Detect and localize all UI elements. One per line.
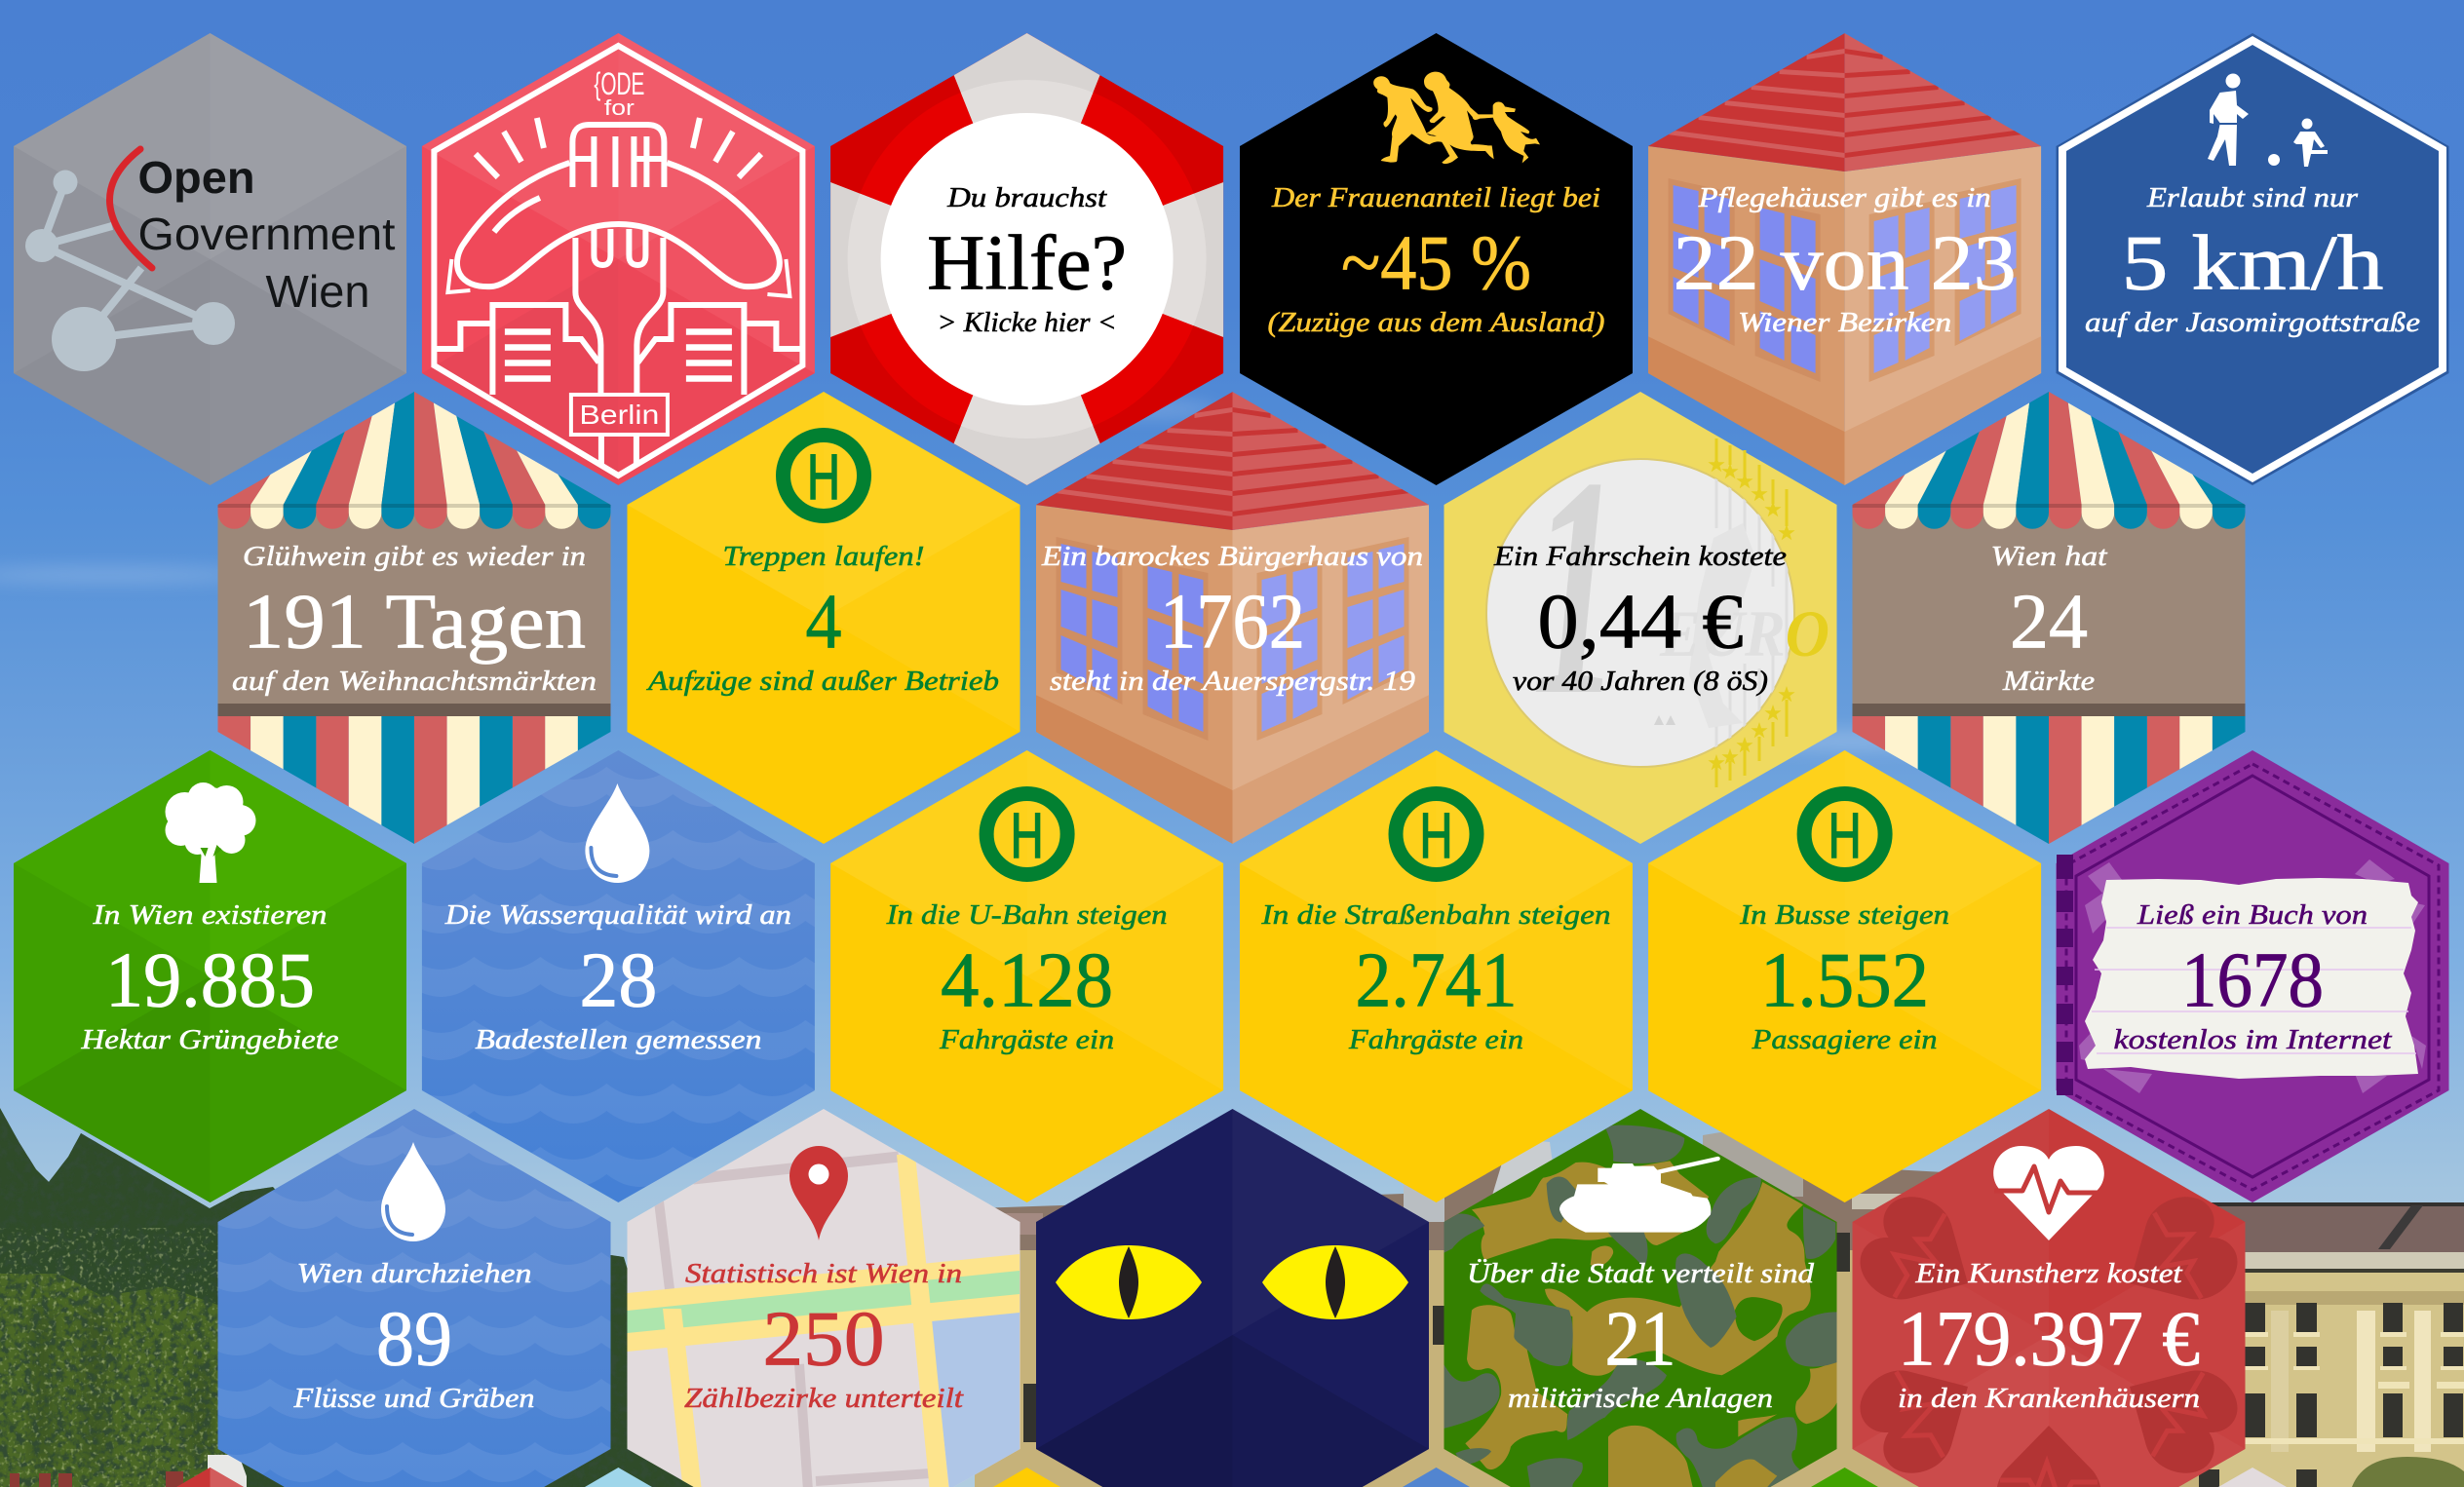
text: Flüsse: 89	[376, 1296, 452, 1382]
text: Zählbezirke: Statistisch ist Wien in	[685, 1258, 962, 1289]
icon: running family	[1373, 72, 1540, 164]
text: Frauenanteil: (Zuzüge aus dem Ausland)	[1267, 307, 1604, 338]
logo text	[579, 66, 659, 430]
text: Schrittgeschwindigkeit: 5 km/h	[2121, 220, 2384, 306]
panel: Glühwein	[217, 255, 611, 848]
text: Fahrschein: 0,44 €	[1538, 579, 1743, 665]
text: Märkte: 24	[2010, 579, 2088, 665]
text: Grüngebiete: 19.885	[105, 937, 315, 1023]
text: Bürgerhaus: steht in der Auerspergstr. 19	[1050, 666, 1416, 697]
text: Glühwein: auf den Weihnachtsmärkten	[232, 666, 597, 697]
logo wordmark: Open	[138, 152, 254, 203]
icon: house	[1035, 392, 1429, 844]
icon: house	[1648, 33, 2042, 485]
text: Märkte: Märkte	[2002, 666, 2095, 697]
panel: Fahrschein coin	[1444, 392, 1836, 844]
text: Schrittgeschwindigkeit	[2085, 182, 2420, 338]
logo text: {ODE	[594, 66, 644, 101]
panel: Buch	[2057, 750, 2448, 1202]
text: Grüngebiete	[80, 899, 339, 1055]
text: Fahrschein: Ein Fahrschein kostete	[1493, 541, 1787, 572]
text: U-Bahn	[885, 899, 1168, 1055]
logo wordmark: Government	[138, 209, 396, 259]
icon: lifebuoy ring	[830, 33, 1224, 485]
text: Pflegehäuser: Wiener Bezirken	[1738, 307, 1951, 338]
text: Zählbezirke	[684, 1258, 964, 1414]
panel: Jasomirgottstraße	[2057, 33, 2448, 485]
icon: network nodes	[25, 170, 235, 371]
text: Busse: In Busse steigen	[1739, 899, 1949, 931]
text: Märkte: Wien hat	[1991, 541, 2108, 572]
icon: cat eyes	[1056, 1245, 1408, 1319]
text: Hilfe: Du brauchst	[946, 182, 1107, 213]
text: Anlagen	[1467, 1258, 1815, 1414]
text: Kunstherz	[1898, 1258, 2200, 1414]
text: Frauenanteil	[1267, 182, 1604, 338]
text: Wasserqualität: Badestellen gemessen	[475, 1024, 761, 1055]
icon: euro coin: EURO	[1659, 596, 1829, 670]
text: Straßenbahn: Fahrgäste ein	[1348, 1024, 1523, 1055]
icon: bus stop sign	[1804, 793, 1885, 875]
icon: bus stop sign	[986, 793, 1067, 875]
background: palace	[975, 1128, 2464, 1487]
text: Kunstherz: Ein Kunstherz kostet	[1914, 1258, 2183, 1289]
text: Buch	[2113, 899, 2393, 1055]
panel: militärische Anlagen	[1443, 1109, 1837, 1487]
text: Märkte	[1990, 541, 2108, 697]
text: Aufzüge: 4	[805, 579, 842, 665]
text: Bürgerhaus: 1762	[1160, 579, 1305, 665]
text: Aufzüge: Aufzüge sind außer Betrieb	[646, 666, 999, 697]
panel: Busse	[1648, 750, 2041, 1202]
text: Glühwein: Glühwein gibt es wieder in	[243, 541, 586, 572]
text: U-Bahn: 4.128	[941, 937, 1113, 1023]
text: Frauenanteil: Der Frauenanteil liegt bei	[1271, 182, 1600, 213]
panel: Kunstherz	[1849, 1109, 2249, 1487]
text: Anlagen: militärische Anlagen	[1508, 1383, 1773, 1414]
text: Busse: Passagiere ein	[1751, 1024, 1938, 1055]
panel: Pflegehäuser	[1648, 33, 2042, 485]
icon: water drop	[381, 1142, 445, 1241]
panel: U-Bahn	[830, 750, 1223, 1202]
text: Fahrschein	[1493, 541, 1787, 697]
logo text: Berlin	[579, 400, 659, 430]
text: U-Bahn: In die U-Bahn steigen	[885, 899, 1168, 931]
panel: Code for Berlin	[422, 33, 815, 485]
text: Buch: Ließ ein Buch von	[2137, 899, 2368, 931]
icon: map pin	[789, 1146, 848, 1240]
text: Straßenbahn	[1260, 899, 1610, 1055]
text: Pflegehäuser: 22 von 23	[1674, 220, 2017, 306]
icon: sausage, fork and city line art	[434, 46, 802, 476]
logo wordmark: Wien	[265, 266, 370, 317]
icon: market stall	[1852, 255, 2246, 848]
text: Zählbezirke: Zählbezirke unterteilt	[684, 1383, 964, 1414]
text: Buch: kostenlos im Internet	[2113, 1024, 2393, 1055]
text: Zählbezirke: 250	[763, 1296, 884, 1382]
logo wordmark	[138, 152, 396, 317]
text: Busse: 1.552	[1760, 937, 1929, 1023]
text: Buch: 1678	[2181, 937, 2324, 1023]
icon: bus stop sign	[1396, 793, 1477, 875]
text: Flüsse: Flüsse und Gräben	[292, 1383, 534, 1414]
cropped next row of hexagons	[176, 1468, 2287, 1487]
text: Busse	[1739, 899, 1949, 1055]
text: Pflegehäuser: Pflegehäuser gibt es in	[1697, 182, 1991, 213]
background: clouds	[0, 402, 2349, 1074]
icon: red arc	[110, 149, 152, 268]
icon: bus stop sign: H	[807, 440, 840, 513]
icon: bus stop sign	[784, 435, 864, 516]
panel: Bürgerhaus	[1035, 392, 1429, 844]
panel: cat eyes	[1036, 1109, 1429, 1487]
icon: heart with pulse	[1993, 1146, 2104, 1240]
text: Fahrschein: vor 40 Jahren (8 öS)	[1513, 666, 1768, 697]
text: Hilfe	[927, 182, 1127, 338]
panel: Open Government Wien	[14, 33, 406, 485]
text: Frauenanteil: ~45 %	[1341, 220, 1531, 306]
text: Glühwein	[232, 541, 597, 697]
text: Aufzüge: Treppen laufen!	[723, 541, 924, 572]
note paper with tape	[2079, 859, 2426, 1093]
icon: pedestrian and child	[2208, 74, 2328, 167]
panel: Aufzüge	[628, 392, 1020, 844]
faint heart pattern	[1849, 1184, 2249, 1487]
panel: Flüsse	[218, 1109, 610, 1487]
icon: bus stop sign: H	[1829, 799, 1862, 871]
text: U-Bahn: Fahrgäste ein	[939, 1024, 1114, 1055]
text: Schrittgeschwindigkeit: auf der Jasomirgottstraße	[2085, 307, 2420, 338]
text: Kunstherz: in den Krankenhäusern	[1898, 1383, 2200, 1414]
background: trees	[0, 1108, 694, 1487]
text: Schrittgeschwindigkeit: Erlaubt sind nur	[2146, 182, 2359, 213]
panel: Märkte	[1852, 255, 2246, 848]
text: Bürgerhaus: Ein barockes Bürgerhaus von	[1041, 541, 1423, 572]
text: Kunstherz: 179.397 €	[1898, 1296, 2200, 1382]
icon: bus stop sign: H	[1419, 799, 1452, 871]
panel: Hilfe lifebuoy	[830, 33, 1224, 485]
text: Straßenbahn: 2.741	[1355, 937, 1517, 1023]
text: Wasserqualität: 28	[579, 937, 657, 1023]
text: Flüsse	[292, 1258, 534, 1414]
text: Aufzüge	[646, 541, 999, 697]
text: Glühwein: 191 Tagen	[243, 579, 586, 665]
text: Pflegehäuser	[1674, 182, 2017, 338]
text: Hilfe: > Klicke hier <	[938, 307, 1117, 338]
icon: tree	[166, 782, 255, 883]
camouflage pattern	[1443, 1125, 1837, 1487]
map streets	[627, 1155, 1020, 1487]
text: Grüngebiete: In Wien existieren	[92, 899, 327, 931]
icon: euro coin: 1	[1532, 412, 1620, 760]
book stitching and spine	[2057, 764, 2439, 1190]
icon: euro coin	[1486, 412, 1829, 787]
panel: Straßenbahn	[1240, 750, 1633, 1202]
text: Grüngebiete: Hektar Grüngebiete	[80, 1024, 339, 1055]
panel: Frauenanteil	[1240, 33, 1633, 485]
icon: market stall	[217, 255, 611, 848]
text: Bürgerhaus	[1041, 541, 1423, 697]
text: Anlagen: 21	[1604, 1296, 1676, 1382]
text: Hilfe: Hilfe?	[927, 220, 1127, 306]
icon: tank	[1559, 1159, 1718, 1233]
text: Wasserqualität: Die Wasserqualität wird an	[444, 899, 791, 931]
panel: Zählbezirke map	[627, 1109, 1020, 1487]
text: Straßenbahn: In die Straßenbahn steigen	[1260, 899, 1610, 931]
icon: bus stop sign: H	[1011, 799, 1044, 871]
panel: Wasserqualität	[422, 750, 815, 1202]
text: Flüsse: Wien durchziehen	[296, 1258, 532, 1289]
text: Wasserqualität	[444, 899, 791, 1055]
panel: Grüngebiete	[14, 750, 406, 1202]
text: Anlagen: Über die Stadt verteilt sind	[1467, 1258, 1815, 1289]
logo text: for	[604, 95, 635, 120]
icon: water drop	[585, 783, 649, 883]
